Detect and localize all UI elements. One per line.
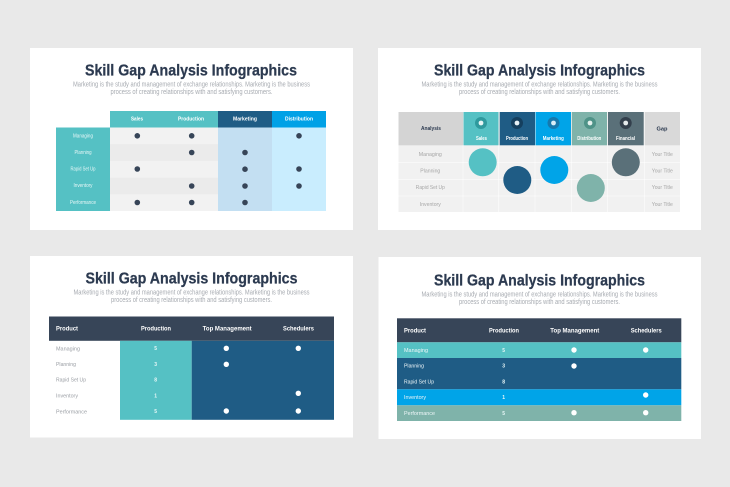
table grid — [398, 112, 680, 212]
production column: 5 — [154, 346, 157, 352]
row labels: Inventory — [420, 202, 441, 208]
row labels: Performance — [70, 200, 96, 206]
header: marketing: Marketing — [543, 136, 564, 142]
subtitle: Marketing is the study and management of exchange relationships. Marketing is the business — [422, 292, 658, 298]
table body stripes — [110, 128, 326, 211]
subtitle: Marketing is the study and management of exchange relationships. Marketing is the business — [422, 82, 658, 88]
rows: 1 — [502, 395, 505, 401]
subtitle: Marketing is the study and management of exchange relationships. Marketing is the business — [73, 82, 310, 88]
row labels: Performance — [56, 409, 87, 415]
header: sales — [464, 112, 498, 145]
production column: 1 — [154, 394, 157, 400]
table header — [397, 318, 681, 342]
header: production: Production — [506, 136, 528, 142]
title: Skill Gap Analysis Infographics — [85, 62, 297, 80]
production column — [120, 341, 192, 420]
rows: 8 — [502, 379, 505, 385]
row labels: Planning — [420, 169, 440, 175]
table header: Product — [404, 328, 426, 334]
table header: Sales — [131, 116, 143, 122]
gap column values — [652, 152, 673, 208]
row labels: Managing — [56, 346, 80, 352]
row labels: Rapid Set Up — [416, 185, 445, 191]
row labels: Rapid Set Up — [70, 166, 96, 172]
subtitle: process of creating relationships with and satisfying customers. — [111, 297, 272, 304]
header: gap — [645, 112, 680, 145]
table header — [49, 316, 334, 341]
header: production — [500, 112, 535, 145]
bubbles — [469, 148, 640, 202]
subtitle: process of creating relationships with and satisfying customers. — [110, 89, 273, 96]
subtitle: process of creating relationships with and satisfying customers. — [459, 89, 620, 96]
header: financial: Financial — [616, 136, 636, 142]
table header: Product — [56, 327, 78, 333]
row labels: Rapid Set Up — [56, 378, 86, 384]
row labels — [416, 152, 445, 208]
header: analysis — [398, 112, 463, 145]
row labels: Inventory — [74, 183, 93, 189]
header: financial — [608, 112, 644, 145]
table header: Top Management — [550, 328, 599, 334]
gap column values: Your Title — [652, 169, 673, 175]
table header: Top Management — [203, 327, 252, 333]
table header: Marketing — [233, 116, 257, 122]
panel: bubble table — [378, 48, 701, 230]
rows: Performance — [404, 411, 435, 417]
panel: row coloured table — [378, 257, 701, 439]
row labels: Managing — [73, 134, 93, 140]
rows: 5 — [502, 411, 505, 417]
table header: Production — [489, 328, 519, 334]
rows: Inventory — [404, 395, 426, 401]
header: sales: Sales — [476, 136, 487, 142]
rows — [397, 342, 681, 421]
gap column values: Your Title — [652, 185, 673, 191]
title: Skill Gap Analysis Infographics — [434, 62, 645, 80]
header: marketing — [536, 112, 571, 145]
dots — [134, 133, 302, 205]
header: distribution: Distribution — [577, 136, 601, 142]
row labels: Planning — [56, 362, 76, 368]
table header: Distribution — [285, 116, 313, 122]
row labels — [56, 346, 87, 415]
table header: Production — [141, 327, 171, 333]
row labels: Inventory — [56, 394, 78, 400]
panel: column coloured table — [30, 256, 353, 438]
production column: 3 — [154, 362, 157, 368]
gap column values: Your Title — [652, 202, 673, 208]
title: Skill Gap Analysis Infographics — [434, 272, 645, 290]
table header — [110, 111, 326, 128]
row labels — [56, 128, 110, 211]
gap column values: Your Title — [652, 152, 673, 158]
rows: Rapid Set Up — [404, 379, 434, 385]
subtitle: Marketing is the study and management of exchange relationships. Marketing is the business — [74, 290, 310, 296]
rows: Planning — [404, 364, 424, 370]
rows: 5 — [502, 348, 505, 354]
subtitle: process of creating relationships with and satisfying customers. — [459, 299, 620, 306]
rows: Managing — [404, 348, 428, 354]
title: Skill Gap Analysis Infographics — [86, 270, 298, 288]
rows: 3 — [502, 364, 505, 370]
dots columns — [192, 341, 334, 420]
table header: Schedulers — [283, 327, 315, 333]
header: distribution — [572, 112, 607, 145]
row labels: Managing — [419, 152, 442, 158]
production column: 5 — [154, 409, 157, 415]
production column: 8 — [154, 378, 157, 384]
row labels: Planning — [74, 150, 92, 156]
header: gap: Gap — [656, 126, 668, 132]
panel: dot matrix table — [30, 48, 353, 230]
table header: Production — [178, 116, 204, 122]
header: analysis: Analysis — [421, 126, 441, 132]
table header: Schedulers — [631, 328, 662, 334]
